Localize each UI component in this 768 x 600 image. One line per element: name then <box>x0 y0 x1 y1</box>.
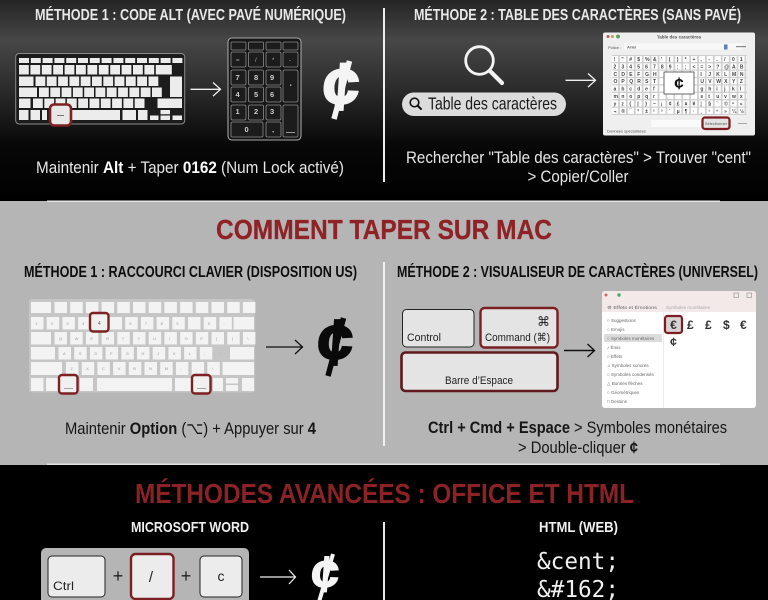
key: space bar highlighted <box>402 352 558 391</box>
text: character viewer instruction: Ctrl + Cmd + Espace > Symboles monétaires <box>428 418 727 437</box>
window: character map: Arial <box>627 44 636 50</box>
window: character map: ¬®¯°±²³´µ¶·¸¹º»¼½ <box>614 108 744 115</box>
icon: Mac keyboard with highlighted keys: 123456789 0- <box>35 321 225 326</box>
icon: magnifying glass <box>466 47 502 83</box>
symbol: highlighted currency cell <box>665 316 682 333</box>
icon: Mac keyboard with highlighted keys <box>29 299 255 394</box>
window: character viewer: ⚙ Effets et Émotions <box>607 304 658 310</box>
icon: laptop keyboard with Alt highlighted <box>16 54 185 126</box>
window: character map: Données spécialisées <box>607 128 646 134</box>
panel: advanced methods <box>0 465 768 600</box>
window: character map: Sélectionner <box>705 121 728 126</box>
panel: Mac methods <box>0 200 768 465</box>
arrow: keyboard to numpad <box>190 82 220 96</box>
key: Ctrl: Ctrl <box>53 579 74 593</box>
window: character viewer: ¢ <box>670 335 677 349</box>
text: option shortcut instruction: Maintenir Option (⌥) + Appuyer sur 4 <box>65 419 316 438</box>
key: slash highlighted: / <box>149 569 154 586</box>
keys: Ctrl slash c: + <box>181 566 191 586</box>
key: right Option highlighted <box>192 375 210 394</box>
key: c: c <box>218 568 224 584</box>
code: HTML entities <box>537 549 619 600</box>
key: 4 highlighted: 4 <box>98 321 101 327</box>
text: copy paste step: > Copier/Coller <box>528 167 629 186</box>
window: character map: mnopqrstuvwx <box>614 94 743 100</box>
key: 4 highlighted <box>90 313 108 332</box>
window: character viewer: ○ Effets <box>607 354 623 359</box>
key: Ctrl <box>48 556 105 597</box>
window: character map: Police : <box>608 45 621 50</box>
arrow: keys to viewer <box>564 344 594 357</box>
window: character map: 23456789:;<=>?@AB <box>614 64 744 70</box>
key: space bar highlighted: Barre d’Espace <box>445 375 513 387</box>
window: character viewer <box>602 291 756 408</box>
arrow: search to window <box>566 74 596 87</box>
window: character map: abcdefghijkl <box>614 86 742 92</box>
icon: numeric keypad: 123 <box>236 107 274 116</box>
window: character viewer: ○ Symboles monétaires <box>607 336 655 341</box>
keys: Ctrl slash c: + <box>113 566 123 586</box>
search pill <box>402 92 566 116</box>
heading: method 1 shortcut: MÉTHODE 1 : RACCOURCI CLAVIER (DISPOSITION US) <box>24 262 357 281</box>
window: character map: !"#$%&'()*+,-./01 <box>614 57 743 63</box>
keys: Ctrl slash c <box>41 548 249 600</box>
heading: Microsoft Word: MICROSOFT WORD <box>131 519 249 536</box>
text: double click step: > Double-cliquer ¢ <box>518 438 638 457</box>
code: HTML entities: &cent; <box>537 549 619 575</box>
window: character map <box>603 32 755 136</box>
window: character viewer: ○ Emojis <box>607 327 625 332</box>
icon: numeric keypad: =/*- <box>236 58 291 64</box>
text: Alt code instruction: Maintenir Alt + Taper 0162 (Num Lock activé) <box>36 158 344 177</box>
heading: HTML web: HTML (WEB) <box>539 519 618 536</box>
icon: Mac keyboard with highlighted keys: ZXCVBNM,./ <box>70 366 214 371</box>
icon: numeric keypad <box>228 38 301 140</box>
icon: numeric keypad: 789 <box>236 73 274 82</box>
arrow: keyboard to cent <box>266 340 302 354</box>
panel: Windows methods <box>0 0 768 201</box>
heading: method 1 Alt code: MÉTHODE 1 : CODE ALT (AVEC PAVÉ NUMÉRIQUE) <box>35 5 346 24</box>
title: advanced methods: MÉTHODES AVANCÉES : OFFICE ET HTML <box>135 478 634 509</box>
key: Command highlighted: Command (⌘) <box>485 332 550 344</box>
icon: cent symbol: ¢ <box>320 50 362 124</box>
key: left Option highlighted <box>59 375 78 394</box>
window: character viewer: □ Dessins <box>607 399 628 404</box>
key: Command highlighted <box>480 308 558 348</box>
icon: Mac keyboard with highlighted keys: ASDFGHJKL;' <box>63 351 221 356</box>
window: character viewer: Symboles monétaires <box>666 305 711 310</box>
window: character map: ¢ <box>674 74 684 93</box>
window: character viewer: ○ Symboles condensés <box>607 372 654 377</box>
window: character viewer: ○ Suggestions <box>607 318 636 323</box>
icon: numeric keypad: 456 <box>236 90 274 99</box>
icon: numeric keypad: 0 <box>244 125 249 134</box>
arrow: Word keys to cent <box>260 570 296 584</box>
icon: Mac keyboard with highlighted keys: QWERTYUIOP[]\ <box>59 336 249 341</box>
window: character viewer: ♪ Émis <box>607 344 621 350</box>
title: how to type on Mac: COMMENT TAPER SUR MAC <box>216 214 552 245</box>
window: character viewer: ££$€ <box>687 318 747 332</box>
window: character map: yz{|}~¡¢£¤¥¦§¨©ª« <box>614 100 743 108</box>
key: Command highlighted: ⌘ <box>537 315 550 330</box>
window: character map: Table des caractères <box>657 34 702 40</box>
symbol: highlighted currency cell: € <box>670 318 677 332</box>
icon: black cent symbol: ¢ <box>315 306 356 378</box>
key: Control <box>402 310 474 347</box>
search pill: Table des caractères <box>428 94 557 114</box>
window: character map: CDEFGHIJKLMN <box>614 72 744 78</box>
key: Alt highlighted <box>50 104 71 126</box>
window: character viewer: ♫ Symboles sonores <box>607 363 649 368</box>
key: c <box>200 556 242 597</box>
window: character viewer: △ Bonnes flèches <box>607 381 643 386</box>
key: slash highlighted <box>131 554 174 599</box>
key: Control: Control <box>407 332 441 344</box>
window: character viewer: ○ Géométriques <box>607 390 640 395</box>
window: character map: OPQRSTUVWXYZ <box>614 79 743 85</box>
